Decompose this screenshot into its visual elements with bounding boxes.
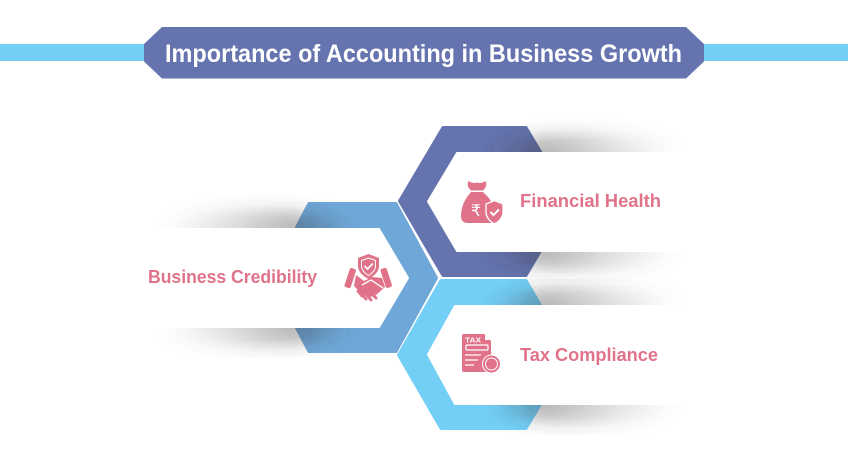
label: tax compliance: Tax Compliance bbox=[520, 344, 658, 365]
panel: business credibility bbox=[130, 229, 408, 327]
panel: financial health bbox=[428, 153, 700, 251]
icon: tax document with seal: TAX bbox=[465, 336, 481, 344]
hexagon: financial health bbox=[400, 128, 570, 276]
icon: handshake with shield bbox=[344, 254, 392, 300]
header band bbox=[0, 27, 848, 78]
hexagon: business credibility bbox=[270, 204, 436, 352]
icon: money bag with shield: ₹ bbox=[471, 201, 481, 220]
icon: money bag with shield bbox=[461, 181, 503, 224]
icon: tax document with seal bbox=[462, 334, 500, 373]
title banner bbox=[144, 27, 704, 78]
shadows behind tabs bbox=[160, 134, 680, 423]
hexagon: tax compliance bbox=[398, 280, 570, 428]
panel: tax compliance bbox=[428, 306, 700, 404]
title: Importance of Accounting in Business Growth bbox=[165, 40, 682, 68]
label: business credibility: Business Credibility bbox=[148, 266, 318, 287]
label: financial health: Financial Health bbox=[520, 190, 661, 211]
